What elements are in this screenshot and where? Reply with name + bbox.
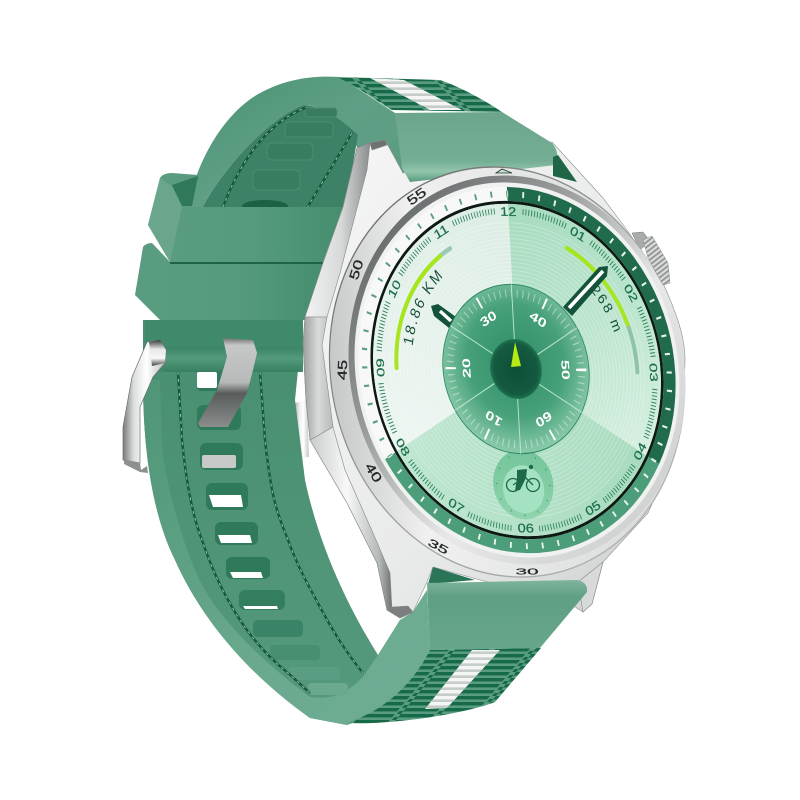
hole 10 [288,667,340,680]
central sub-dial [438,283,594,455]
hole 3 [200,443,243,470]
bezel 50: 50 [347,258,367,282]
small subdial ticks [495,453,552,516]
bezel scale numbers [336,169,539,577]
hole 7 [239,590,285,610]
chapter ring medium section [390,456,659,548]
lower strap front face [427,580,587,650]
elevation arc gauge [567,248,637,372]
hour numerals [365,202,669,538]
lower woven band [347,648,541,723]
dial sector bottom [393,368,651,538]
hour numerals: 03 [647,363,660,382]
hour numerals: 07 [446,495,466,516]
hour numerals: 06 [517,521,534,535]
lower strap outer rim [143,380,430,725]
crown ridges [643,236,670,285]
chapter ring [355,191,679,549]
bezel triangle [496,169,512,173]
upper strap stitching [223,107,352,208]
sub-dial centre [489,339,543,399]
hour numerals: 02 [621,281,641,305]
lower strap under-lug shadow [428,567,475,584]
bike frame [513,477,533,485]
keeper inner shadow [172,176,198,206]
upper side facet [305,143,370,317]
rider body [515,469,527,491]
upper strap arch [188,77,405,212]
sub-dial numerals: 50 [558,360,572,380]
distance label [408,269,456,347]
hole 6 [226,557,270,579]
lower lug tip [387,606,413,618]
bezel 55: 55 [405,185,429,209]
hole 8 [253,620,303,637]
crown [632,232,670,285]
bezel 40: 40 [362,461,384,485]
dial sector upper right [508,204,665,456]
steel loop tongue [198,338,257,427]
cycling icon [506,465,540,492]
hole 5 [215,522,258,545]
buckle pin bar [160,347,303,372]
hole 11 [308,683,348,695]
black inner ring [363,200,671,540]
upper strap front face [395,112,557,182]
sub-dial numerals: 60 [533,407,554,430]
upper strap inner face [202,105,358,210]
minute hand [563,266,608,316]
strap connector under keeper [145,320,303,372]
bezel 45: 45 [336,359,350,380]
hour numerals: 05 [583,498,603,519]
case side facets [303,140,603,618]
sub-dial dividers [448,283,584,455]
lower keeper loop [135,243,325,320]
hole 9 [270,645,320,660]
upper keeper loop [148,173,343,262]
hour numerals: 01 [568,224,588,245]
concentric guilloche lines [382,221,652,519]
silver inner rim [341,176,693,564]
bike wheels [506,478,520,492]
hour numerals: 04 [631,439,649,463]
bezel 35: 35 [426,537,451,557]
rider head [529,465,533,469]
keeper separator [170,262,325,264]
chapter ring white section [355,191,522,458]
watch face: 18.86 KM [404,270,442,346]
hour numerals: 11 [431,222,451,242]
white stripe [370,78,462,110]
middle side facet [303,317,333,440]
small cycling subdial [491,449,555,520]
hour numerals: 10 [385,277,404,301]
lower strap stitching [178,372,363,693]
keeper left facet [148,178,182,262]
chapter ring dark section [507,194,674,461]
lower side facet [310,427,392,610]
sub-dial numerals: 30 [478,308,499,331]
chapter ring ticks [355,191,679,549]
strap shadow [242,200,288,212]
sub-dial numerals: 40 [527,309,548,332]
dial sector left [364,201,522,453]
steel sliver behind strap [295,400,309,458]
upper strap dark side [553,155,577,182]
minute track [371,208,663,532]
hole 1 [197,372,224,391]
sub-dial major ticks [446,292,586,446]
sub-dial numerals [457,308,575,430]
watch face: 268 m [592,286,620,332]
sub-dial numerals: 20 [460,358,474,378]
buckle top barrel [149,340,166,366]
sub-dial numerals: 10 [484,406,505,429]
watch face [348,176,686,564]
upper lug tip [370,140,387,150]
elevation label [591,290,621,361]
lower strap main band [143,320,430,725]
steel buckle [123,340,166,473]
hour hand [431,304,456,328]
sub-dial minor ticks [446,292,586,446]
hour numerals: 12 [500,205,517,219]
steel watch case [303,140,685,618]
distance arc gauge [390,247,457,369]
hole 4 [206,483,248,510]
bezel 30: 30 [515,567,539,577]
hole 2 [197,405,241,430]
hour numerals: 09 [374,358,387,377]
upper woven band [337,77,502,112]
right lug [578,562,603,612]
hour numerals: 08 [393,435,413,459]
strap holes [197,372,348,695]
dial sectors [364,201,670,539]
upper strap slots [253,108,337,190]
upper strap rim [188,77,405,208]
lime needle [511,342,521,367]
tachymeter bezel [319,164,695,580]
smartwatch product illustration [122,76,686,725]
small subdial inner glow [502,465,546,514]
buckle end piece [124,460,148,473]
white stripe [425,650,500,709]
